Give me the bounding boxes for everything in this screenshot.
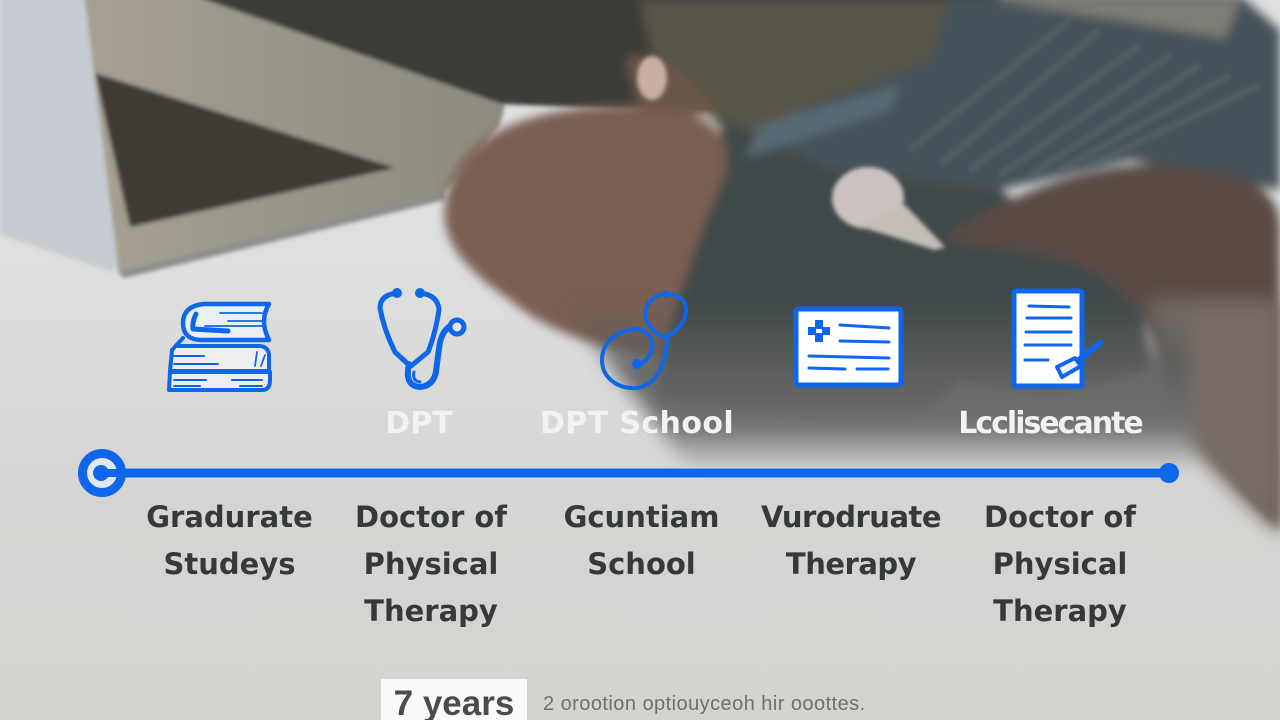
step 5 text: Therapy: [993, 594, 1127, 628]
step 1 text: Gradurate: [146, 500, 313, 534]
footnote text: 2 orootion optiouyceoh hir ooottes.: [543, 693, 866, 715]
step 5 text: Physical: [993, 547, 1127, 581]
step 2 text: Physical: [364, 547, 498, 581]
step 1 text: Studeys: [164, 547, 296, 581]
label: DPT School: DPT School: [540, 406, 734, 441]
step 5 text: [984, 500, 1136, 628]
step 3 text: Gcuntiam: [564, 500, 719, 534]
step 5 text: Doctor of: [984, 500, 1136, 534]
step 4 text: [761, 500, 941, 581]
step 3 text: [564, 500, 719, 581]
step 2 text: Therapy: [364, 594, 498, 628]
label: Lcclisecante: Lcclisecante: [958, 406, 1142, 441]
label: DPT: DPT: [385, 406, 453, 441]
step 3 text: School: [587, 547, 696, 581]
step 2 text: Doctor of: [355, 500, 507, 534]
step 1 text: [146, 500, 313, 581]
step 4 text: Therapy: [786, 547, 916, 581]
step 2 text: [355, 500, 508, 628]
step 4 text: Vurodruate: [761, 500, 941, 534]
